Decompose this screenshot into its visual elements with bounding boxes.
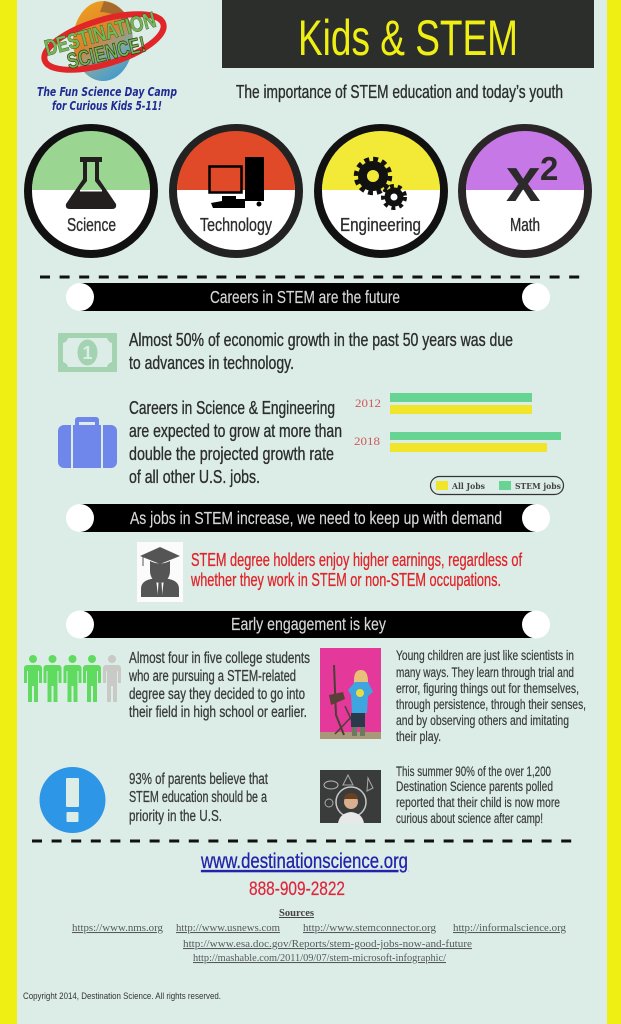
photo: boy with astronaut drawing [320, 770, 381, 823]
text: careers growth: are expected to grow at more than [129, 421, 342, 441]
sources list: http://www.stemconnector.org [303, 923, 437, 934]
text: summer poll: curious about science after camp! [396, 811, 543, 826]
icon: money [58, 333, 117, 372]
text: economic growth: to advances in technology. [129, 353, 294, 373]
sources list: http://www.usnews.com [176, 923, 280, 934]
circle: Math: x [506, 146, 541, 215]
sources list: http://informalscience.org [453, 923, 567, 934]
text: earnings [190, 550, 523, 590]
circle: Science: Science [67, 215, 116, 235]
icon: money: 1 [82, 343, 93, 363]
bar chart: job growth: 2018 [354, 434, 380, 448]
icon: five people [24, 655, 121, 702]
bar chart: job growth [354, 393, 561, 452]
text: parents priority: priority in the U.S. [129, 808, 222, 825]
text: economic growth: Almost 50% of economic growth in the past 50 years was due [129, 330, 513, 350]
text: four in five: their field in high school or earlier. [129, 704, 307, 721]
section banner: demand [66, 504, 550, 532]
icon: graduate [137, 542, 183, 602]
icon: exclamation [40, 767, 106, 833]
circle: Math: 2 [540, 150, 558, 187]
text: summer poll [396, 764, 560, 826]
text: summer poll: reported that their child is now more [396, 795, 560, 810]
text: parents priority [129, 771, 269, 825]
text: earnings: whether they work in STEM or non-STEM occupations. [190, 570, 501, 590]
circle: Math: Math [510, 215, 540, 235]
text: economic growth [129, 330, 513, 373]
text: summer poll: Destination Science parents polled [396, 779, 553, 794]
sources list [72, 923, 567, 964]
text: parents priority: 93% of parents believe that [129, 771, 269, 788]
text: four in five [128, 650, 310, 721]
section banner: demand: As jobs in STEM increase, we need to keep up with demand [130, 508, 502, 528]
title banner [222, 0, 594, 68]
section banner: Careers: Careers in STEM are the future [210, 287, 400, 307]
circle: Science [28, 128, 154, 254]
sources heading: Sources [279, 908, 314, 919]
phone number: 888-909-2822 [249, 879, 345, 900]
text: parents priority: STEM education should be a [129, 789, 267, 806]
text: young children: their play. [396, 729, 441, 744]
website link: www.destinationscience.org [200, 850, 408, 873]
text: careers growth: of all other U.S. jobs. [129, 467, 260, 487]
logo tagline [37, 85, 177, 113]
chart legend [430, 476, 564, 494]
section banner: Careers [66, 283, 550, 311]
sources list: http://www.esa.doc.gov/Reports/stem-good-jobs-now-and-future [183, 939, 472, 950]
text: four in five: degree say they decided to go into [129, 686, 305, 703]
icon: briefcase [58, 417, 117, 468]
sources list: https://www.nms.org [72, 923, 164, 934]
logo tagline: for Curious Kids 5-11! [52, 99, 162, 113]
title banner: Kids & STEM [298, 10, 518, 66]
circle: Math [462, 128, 588, 254]
section banner: early engagement [66, 610, 550, 638]
section banner: early engagement: Early engagement is key [231, 614, 386, 634]
circle: Engineering: Engineering [340, 215, 421, 235]
text: careers growth: Careers in Science & Engineering [129, 398, 335, 418]
text: summer poll: This summer 90% of the over 1,200 [396, 764, 551, 779]
text: four in five: Almost four in five college students [129, 650, 310, 667]
bar chart: job growth: 2012 [355, 396, 381, 410]
text: careers growth [129, 398, 342, 487]
text: young children: and by observing others and imitating [396, 713, 569, 728]
circle: Engineering [318, 128, 444, 254]
circle: Technology: Technology [200, 215, 272, 235]
photo: girl on pink [320, 648, 381, 739]
chart legend: All Jobs [451, 482, 485, 492]
text: careers growth: double the projected growth rate [129, 444, 334, 464]
sources list: http://mashable.com/2011/09/07/stem-microsoft-infographic/ [193, 953, 446, 964]
text: four in five: who are pursuing a STEM-related [128, 668, 296, 685]
logo tagline: The Fun Science Day Camp [37, 85, 177, 99]
chart legend: STEM jobs [515, 482, 561, 492]
circle: Technology [173, 128, 299, 254]
logo: Destination Science: SCIENCE! [65, 32, 148, 74]
logo: Destination Science [38, 1, 170, 81]
logo: Destination Science: DESTINATION [42, 7, 158, 61]
text: young children [396, 648, 586, 744]
copyright: Copyright 2014, Destination Science. All rights reserved. [23, 991, 221, 1002]
